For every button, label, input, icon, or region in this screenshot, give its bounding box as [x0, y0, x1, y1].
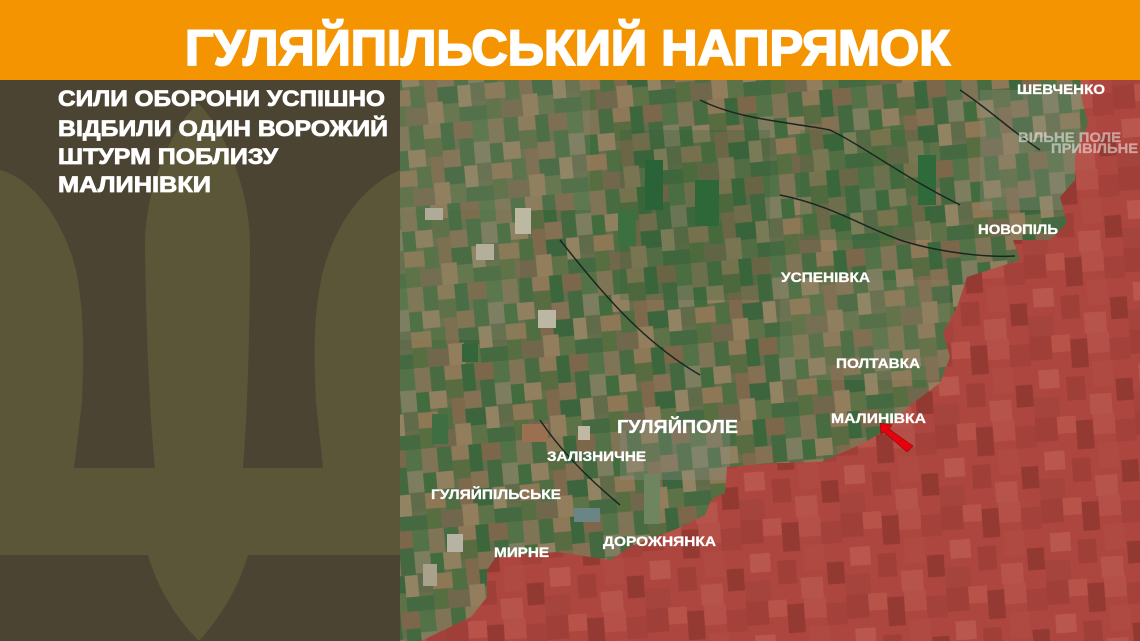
title: ГУЛЯЙПІЛЬСЬКИЙ НАПРЯМОК	[185, 19, 950, 76]
map labels: ДОРОЖНЯНКА	[603, 533, 716, 549]
map labels: МАЛИНІВКА	[831, 410, 926, 426]
map labels: НОВОПІЛЬ	[978, 221, 1058, 237]
map labels: УСПЕНІВКА	[781, 269, 870, 285]
occupied territory overlay	[400, 80, 1140, 641]
map labels: ГУЛЯЙПОЛЕ	[617, 416, 738, 437]
map labels: ШЕВЧЕНКО	[1017, 81, 1105, 97]
ravines	[540, 90, 1040, 505]
text block: summary	[58, 86, 388, 197]
map labels: ЗАЛІЗНИЧНЕ	[547, 448, 646, 464]
satellite map	[400, 80, 1140, 641]
text block: summary: ШТУРМ ПОБЛИЗУ	[58, 144, 278, 169]
map labels: ГУЛЯЙПІЛЬСЬКЕ	[431, 485, 561, 502]
text block: summary: ВІДБИЛИ ОДИН ВОРОЖИЙ	[58, 116, 388, 141]
greener and greyer patches of fields	[400, 80, 1080, 586]
map labels: МИРНЕ	[494, 544, 549, 560]
icon: trident watermark	[0, 103, 400, 641]
left panel background	[0, 80, 400, 641]
header banner	[0, 0, 1140, 80]
map labels	[431, 81, 1138, 560]
text block: summary: СИЛИ ОБОРОНИ УСПІШНО	[58, 86, 385, 111]
map labels: ПРИВІЛЬНЕ	[1051, 140, 1138, 156]
muting wash over fields	[400, 80, 1140, 641]
arrow: attack direction	[880, 423, 913, 452]
map labels: ПОЛТАВКА	[836, 355, 920, 371]
text block: summary: МАЛИНІВКИ	[58, 172, 211, 197]
map labels: ВІЛЬНЕ ПОЛЕ	[1018, 129, 1121, 145]
